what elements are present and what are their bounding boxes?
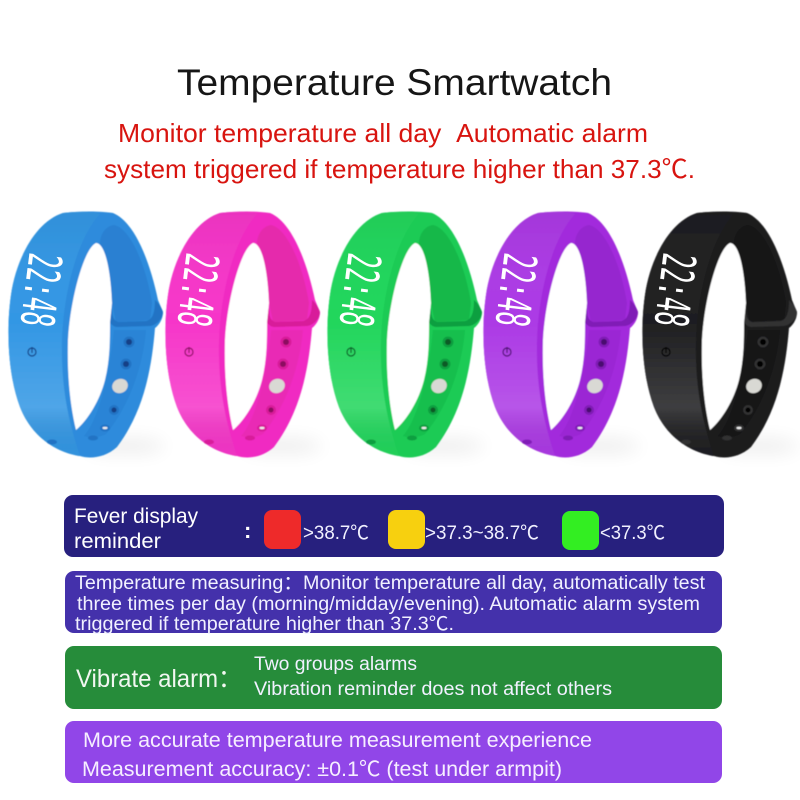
subtitle: system triggered if temperature higher than 37.3℃.: [104, 154, 695, 184]
subtitle: [104, 118, 695, 184]
panel: fever display reminder: [64, 495, 724, 557]
subtitle: Monitor temperature all day Automatic alarm: [118, 118, 648, 148]
panel: accuracy: [65, 721, 722, 783]
label: above 38.7: >38.7℃: [303, 523, 369, 544]
watch display digits: 22:48: [484, 250, 547, 330]
wristband: green: [327, 212, 484, 457]
wristband: blue: [8, 212, 165, 457]
panel: vibrate alarm: [65, 646, 722, 709]
text: temperature measuring description: Temperature measuring：Monitor temperature all day, automatically test: [75, 573, 706, 594]
label: below 37.3: <37.3℃: [600, 523, 665, 544]
heading: fever display reminder: Fever display: [74, 505, 198, 528]
text: alarm details: Vibration reminder does not affect others: [254, 679, 612, 700]
label: 37.3 to 38.7: >37.3~38.7℃: [425, 523, 539, 544]
watch display digits: 22:48: [166, 250, 229, 330]
heading: vibrate alarm: Vibrate alarm：: [76, 665, 242, 693]
text: temperature measuring description: [75, 573, 706, 635]
text: temperature measuring description: three times per day (morning/midday/evening). Automatic alarm system: [77, 594, 700, 615]
text: alarm details: [254, 654, 612, 700]
text: accuracy details: Measurement accuracy: ±0.1℃ (test under armpit): [82, 758, 562, 781]
wristband: pink: [165, 212, 322, 457]
text: accuracy details: More accurate temperature measurement experience: [83, 729, 592, 752]
swatch: red: [264, 510, 301, 549]
heading: fever display reminder: reminder: [74, 530, 161, 553]
colon: :: [244, 518, 251, 543]
heading: fever display reminder: [74, 505, 198, 553]
watch display digits: 22:48: [643, 250, 706, 330]
watch display digits: 22:48: [9, 250, 72, 330]
swatch: green: [562, 511, 599, 550]
text: alarm details: Two groups alarms: [254, 654, 417, 675]
panel: temperature measuring: [65, 571, 722, 635]
wristband: purple: [483, 212, 640, 457]
watch display digits: 22:48: [328, 250, 391, 330]
swatch: yellow: [388, 510, 425, 549]
text: temperature measuring description: triggered if temperature higher than 37.3℃.: [75, 614, 454, 635]
title: Temperature Smartwatch: [177, 62, 612, 103]
text: accuracy details: [82, 729, 592, 781]
wristband: black: [642, 212, 799, 457]
